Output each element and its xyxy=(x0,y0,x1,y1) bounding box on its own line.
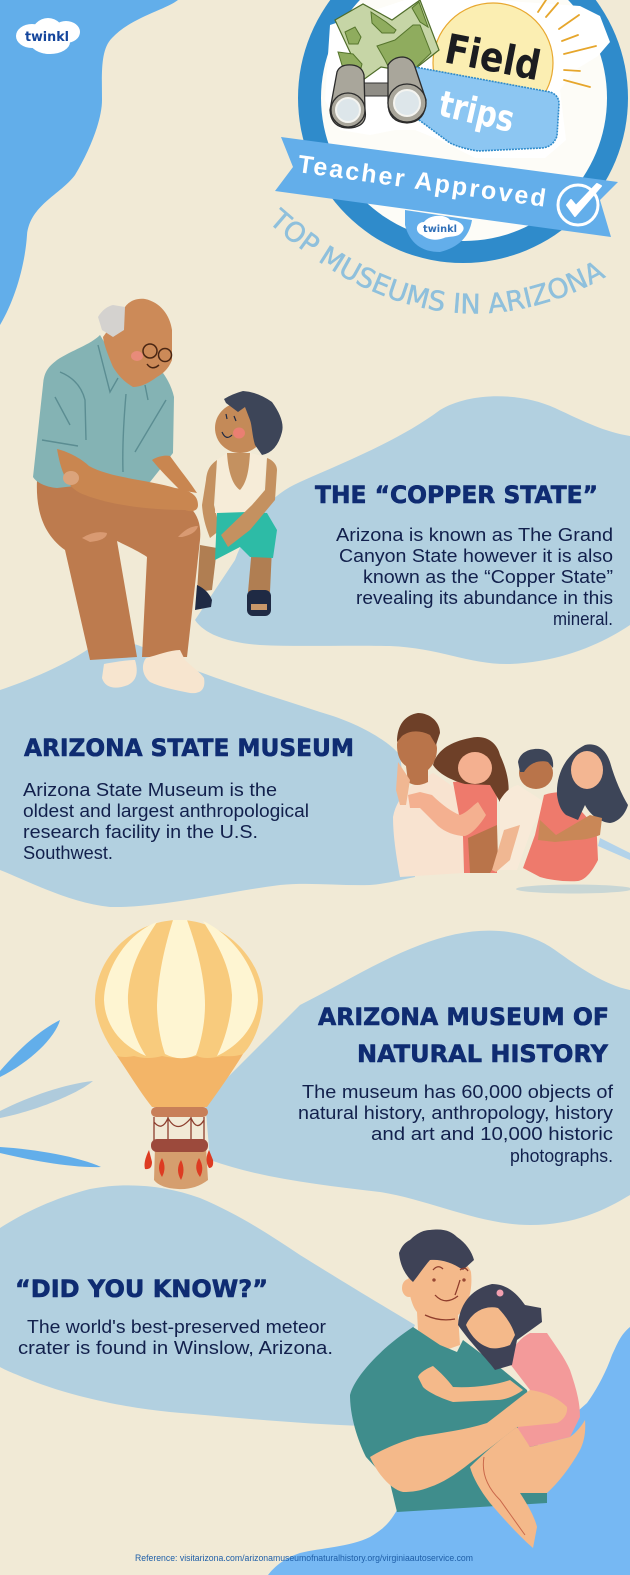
man shirt xyxy=(393,773,470,877)
top-left blue background shape xyxy=(0,0,178,325)
badge inner disc xyxy=(321,0,607,241)
father face details xyxy=(425,1267,468,1320)
text: Arizona State Museum: Southwest. xyxy=(23,843,113,863)
girl arm xyxy=(418,1366,523,1402)
knee patches xyxy=(82,532,107,542)
bottom-right blue background shape xyxy=(268,1327,630,1575)
near arm xyxy=(57,449,198,511)
decorative leaves left of balloon xyxy=(0,1020,101,1167)
ring xyxy=(151,1107,208,1117)
hair xyxy=(224,391,283,455)
heading: natural history: ARIZONA MUSEUM OF xyxy=(318,1003,609,1031)
text: did you know: crater is found in Winslow, Arizona. xyxy=(18,1338,333,1358)
woman legs xyxy=(468,825,498,873)
text: copper state: Arizona is known as The Grand xyxy=(336,525,613,545)
hair xyxy=(98,305,125,337)
heading: Arizona State Museum: ARIZONA STATE MUSEUM xyxy=(24,734,354,762)
binoculars xyxy=(330,57,426,128)
girl face xyxy=(466,1307,515,1348)
text: Arizona State Museum: Arizona State Museum is the xyxy=(23,780,277,800)
text: copper state: revealing its abundance in this xyxy=(356,588,613,608)
sandals xyxy=(195,585,212,610)
trips label xyxy=(415,67,559,151)
girl arm xyxy=(408,792,486,836)
text: did you know: The world's best-preserved meteor xyxy=(27,1317,326,1337)
badge twinkl logo xyxy=(417,216,464,240)
head xyxy=(103,299,172,387)
boy hair xyxy=(518,749,553,772)
shoes xyxy=(102,660,137,688)
head xyxy=(215,403,265,453)
curved title: TOP MUSEUMS IN ARIZONA xyxy=(273,206,606,314)
text: copper state xyxy=(336,525,613,629)
cheek xyxy=(131,351,143,361)
title word: Field: Field xyxy=(441,25,544,90)
text: Arizona State Museum xyxy=(23,780,309,863)
heading: natural history xyxy=(318,1003,609,1068)
heading: did you know: “DID YOU KNOW?” xyxy=(15,1275,268,1303)
woman shirt xyxy=(453,779,497,873)
ribbon: Teacher Approved xyxy=(296,150,548,213)
woman 2 arm xyxy=(538,815,602,842)
basket xyxy=(154,1147,208,1189)
badge twinkl logo: twinkl xyxy=(423,224,457,235)
man arm behind xyxy=(396,762,410,805)
boy head xyxy=(519,757,553,789)
far arm xyxy=(152,456,197,493)
check mark xyxy=(558,184,601,225)
father hair xyxy=(399,1229,474,1282)
tank top xyxy=(215,453,267,513)
text: natural history: The museum has 60,000 objects of xyxy=(302,1082,614,1102)
man hair xyxy=(397,713,440,745)
boy arm xyxy=(492,825,520,872)
blob: Arizona State Museum panel xyxy=(0,641,415,907)
girl hair xyxy=(458,1284,542,1370)
girl head xyxy=(458,752,492,784)
skirt xyxy=(117,1054,243,1107)
dress xyxy=(507,1333,580,1447)
text: copper state: known as the “Copper State” xyxy=(363,567,613,587)
text: Arizona State Museum: oldest and largest anthropological xyxy=(23,801,309,821)
twinkl logo xyxy=(16,18,80,54)
text: Arizona State Museum: research facility in the U.S. xyxy=(23,822,258,842)
illustration: hot air balloon xyxy=(95,920,263,1189)
text: copper state: Canyon State however it is also xyxy=(339,546,613,566)
text: natural history: natural history, anthropology, history xyxy=(298,1103,613,1123)
arm xyxy=(221,458,277,547)
sun xyxy=(433,0,596,123)
family leaf and ground shadow xyxy=(516,838,630,894)
illustration: father and daughter xyxy=(350,1229,585,1548)
illustration: boy xyxy=(195,391,283,616)
girl hair xyxy=(433,737,509,802)
text: did you know xyxy=(18,1317,333,1358)
map xyxy=(335,0,439,80)
legs xyxy=(197,545,217,592)
heading: natural history: NATURAL HISTORY xyxy=(357,1040,609,1068)
blob: did you know panel xyxy=(0,1185,415,1426)
ear xyxy=(402,1279,416,1297)
ribbon xyxy=(275,137,618,252)
heading: copper state: THE “COPPER STATE” xyxy=(315,481,598,509)
text: natural history xyxy=(298,1082,614,1166)
envelope xyxy=(95,920,263,1058)
father arm xyxy=(370,1390,567,1492)
neck and face xyxy=(408,1258,471,1352)
twinkl logo: twinkl xyxy=(25,30,69,45)
tassels xyxy=(144,1150,213,1180)
man head xyxy=(397,728,437,785)
woman 2 hair xyxy=(557,744,628,823)
sticker backing xyxy=(325,0,610,158)
glasses and smile xyxy=(143,344,172,368)
blob: copper state panel xyxy=(195,396,630,664)
pants xyxy=(37,480,200,660)
illustration: grandfather xyxy=(33,299,204,693)
boy shirt xyxy=(500,785,546,870)
blob: natural history panel xyxy=(205,931,630,1225)
ropes xyxy=(154,1117,204,1145)
girl legs xyxy=(470,1420,585,1548)
illustration: family xyxy=(393,713,628,881)
title word: trips: trips xyxy=(435,84,518,141)
reference line: Reference: visitarizona.com/arizonamuseumofnaturalhistory.org/virginiaautoservice.com xyxy=(135,1553,473,1563)
text: natural history: photographs. xyxy=(510,1146,613,1166)
woman 2 face xyxy=(571,751,603,789)
woman 2 shirt xyxy=(523,792,598,881)
badge ring xyxy=(298,0,628,263)
hair bow xyxy=(496,1290,504,1296)
shirt xyxy=(33,335,174,488)
shorts xyxy=(215,512,277,560)
text: copper state: mineral. xyxy=(553,609,613,629)
badge: Field Trips Teacher Approved xyxy=(275,0,628,263)
back arm xyxy=(202,460,220,538)
text: natural history: and art and 10,000 historic xyxy=(371,1124,613,1144)
shirt xyxy=(350,1327,547,1512)
